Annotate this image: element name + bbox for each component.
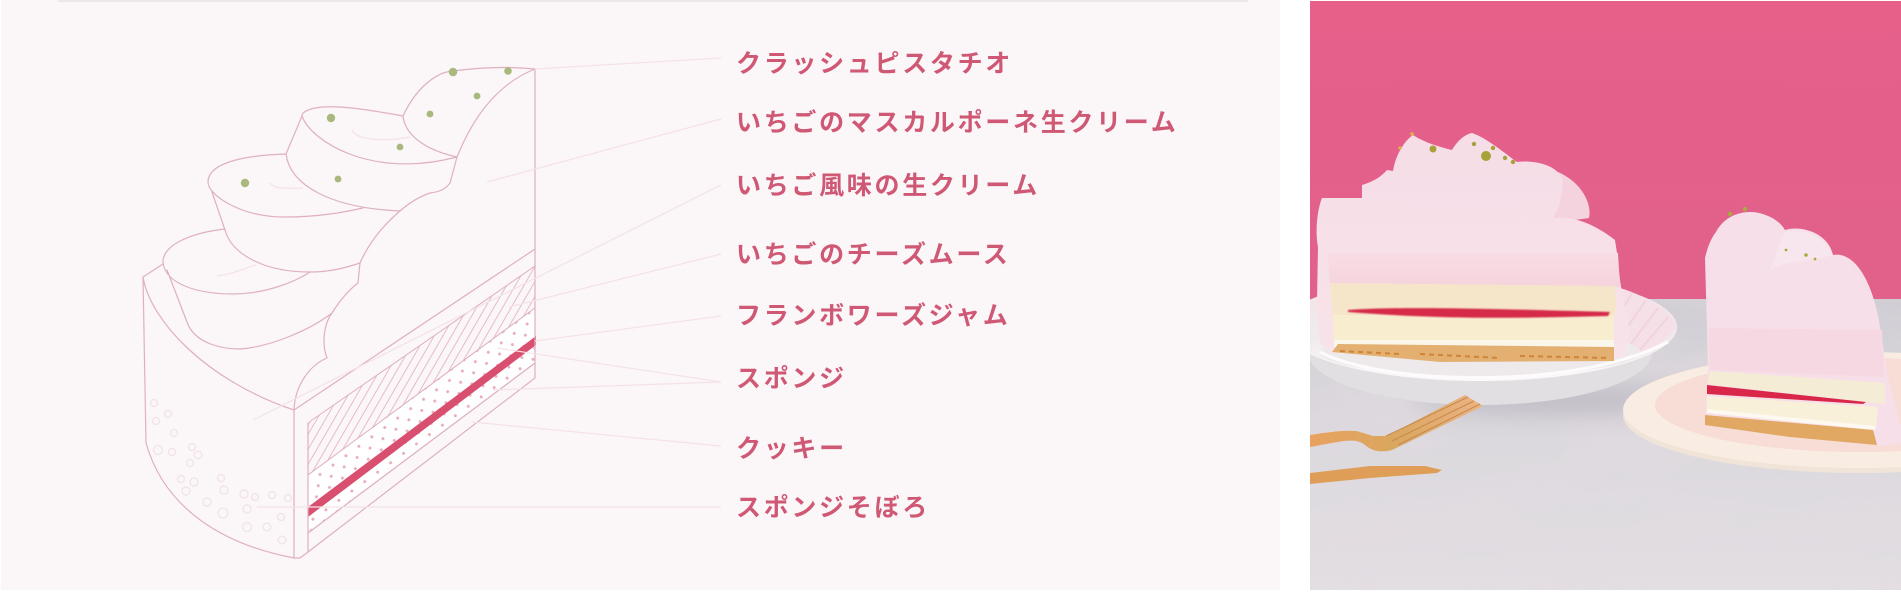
layer: framboise jam [308,336,536,517]
label: sponge: スポンジ [736,365,847,393]
label: sponge crumbs: スポンジそぼろ [736,494,930,522]
cake cross-section illustration [143,67,536,558]
lower sponge [1707,396,1878,428]
cake slice: small [1705,207,1901,446]
cream back swirl [1553,172,1590,220]
back swirl highlight [1832,254,1833,255]
plate: white fluted plate [1310,288,1677,405]
outline: cake outer side [143,264,294,558]
mousse layer [1880,330,1882,342]
label: framboise jam: フランボワーズジャム [736,301,1011,330]
upper sponge [1707,371,1885,404]
photo background wall [1310,0,1901,300]
plate: cream plate [1623,352,1901,473]
white cream line [1707,409,1875,430]
cookie layer [1705,415,1877,445]
outline: main cream edge [294,157,457,410]
cookie layer [1332,344,1614,362]
panel: cake diagram [1,0,1280,590]
cream body [1705,212,1901,446]
knife [1310,466,1442,484]
photo: two cake slices on plates [1283,0,1901,591]
layer: sponge with dots [308,308,535,533]
label: strawberry cheese mousse: いちごのチーズムース [736,240,1011,269]
label: crushed pistachio: クラッシュピスタチオ [736,50,1013,78]
fork [1310,395,1483,451]
pistachio crumbs [1398,132,1515,164]
white cream line [1334,340,1614,347]
outline: cream swirl three [286,107,457,211]
upper sponge [1330,283,1616,320]
layer: strawberry cheese mousse hatching [308,266,535,475]
pistachio dots [241,67,512,187]
outline: cookie and cake front [294,69,535,558]
jam layer [1707,385,1866,404]
labels [736,50,1178,522]
lower sponge [1333,316,1614,340]
outline: cream swirl one [163,229,332,349]
label: strawberry mascarpone cream: いちごのマスカルポーネ生クリーム [736,108,1178,137]
sponge crumbs [150,400,292,544]
cake slice: large [1317,132,1630,362]
label: strawberry flavored cream: いちご風味の生クリーム [736,171,1040,200]
inner cream accent strokes [217,130,410,276]
outline: cream swirl four [403,67,535,157]
photo marble table [1310,299,1901,591]
leader lines [253,58,721,507]
label: cookie: クッキー [736,435,847,463]
outline: cream swirl two [208,154,363,272]
jam layer [1348,308,1610,318]
cream body [1317,133,1630,358]
pistachio crumbs [1728,207,1816,260]
mousse layer [1328,253,1620,287]
